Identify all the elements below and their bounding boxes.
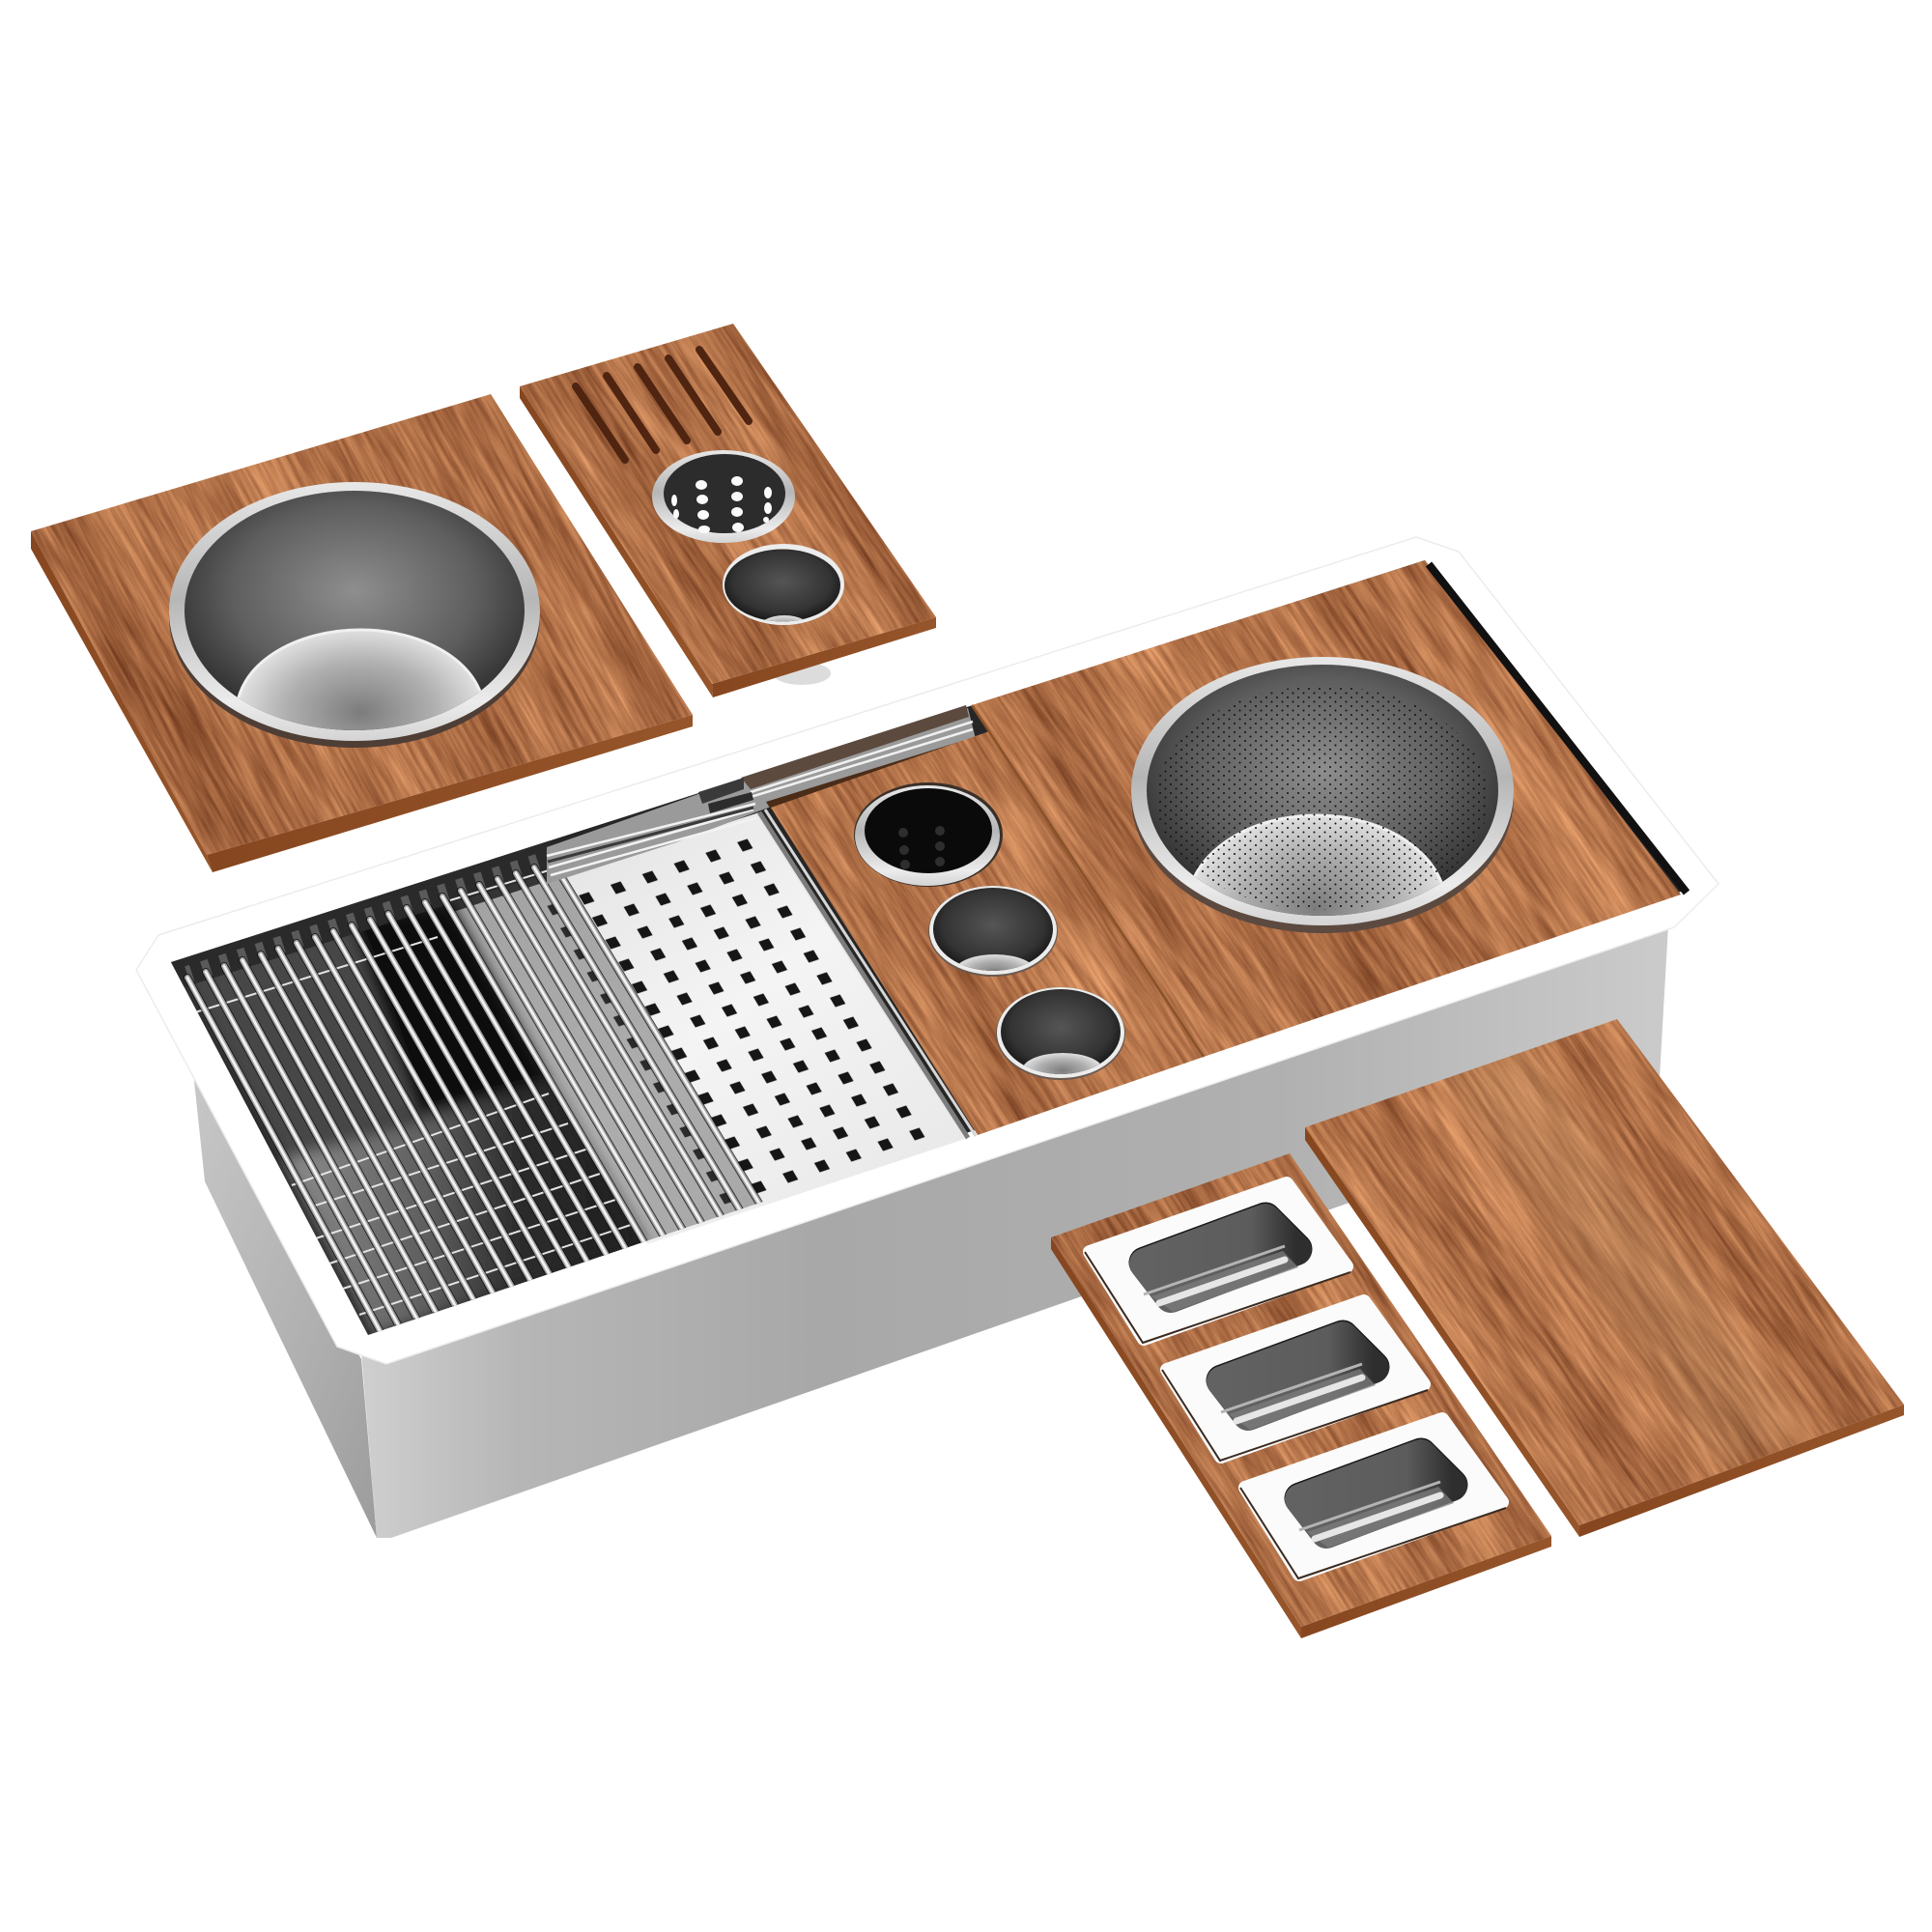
bowl on left board xyxy=(169,482,540,748)
rack background xyxy=(171,840,762,1335)
sink opening xyxy=(171,560,1684,1335)
board: three-cup insert in sink xyxy=(771,732,1204,1135)
cup: middle in sink board xyxy=(928,886,1058,977)
pan 3 xyxy=(1240,1419,1506,1578)
cross wires xyxy=(195,870,631,1315)
rod feet xyxy=(373,1293,493,1333)
sink basin body xyxy=(192,925,1668,1538)
roll-up drying rack xyxy=(171,840,762,1335)
cup: lower in sink board xyxy=(996,987,1125,1088)
board: large strainer insert in sink xyxy=(971,560,1690,1058)
small cup on utensil board xyxy=(723,544,844,625)
sink rim xyxy=(136,537,1719,1364)
condiment board with pans xyxy=(867,957,1721,1840)
cup: perforated in sink board xyxy=(854,782,1003,887)
rods xyxy=(187,862,761,1332)
pan 2 xyxy=(1162,1301,1428,1461)
perforated tray xyxy=(450,810,976,1244)
pan 1 xyxy=(1085,1183,1350,1343)
utensil board with slots xyxy=(520,324,936,697)
tray rail xyxy=(547,705,978,884)
cutting board: left with bowl xyxy=(31,394,693,872)
plain cutting board xyxy=(1305,1019,1904,1537)
colander bowl in sink board xyxy=(1131,657,1514,933)
perforated cup on utensil board xyxy=(652,450,795,543)
illustration: workstation sink with accessories xyxy=(31,324,1904,1638)
rack header tips xyxy=(187,858,553,975)
